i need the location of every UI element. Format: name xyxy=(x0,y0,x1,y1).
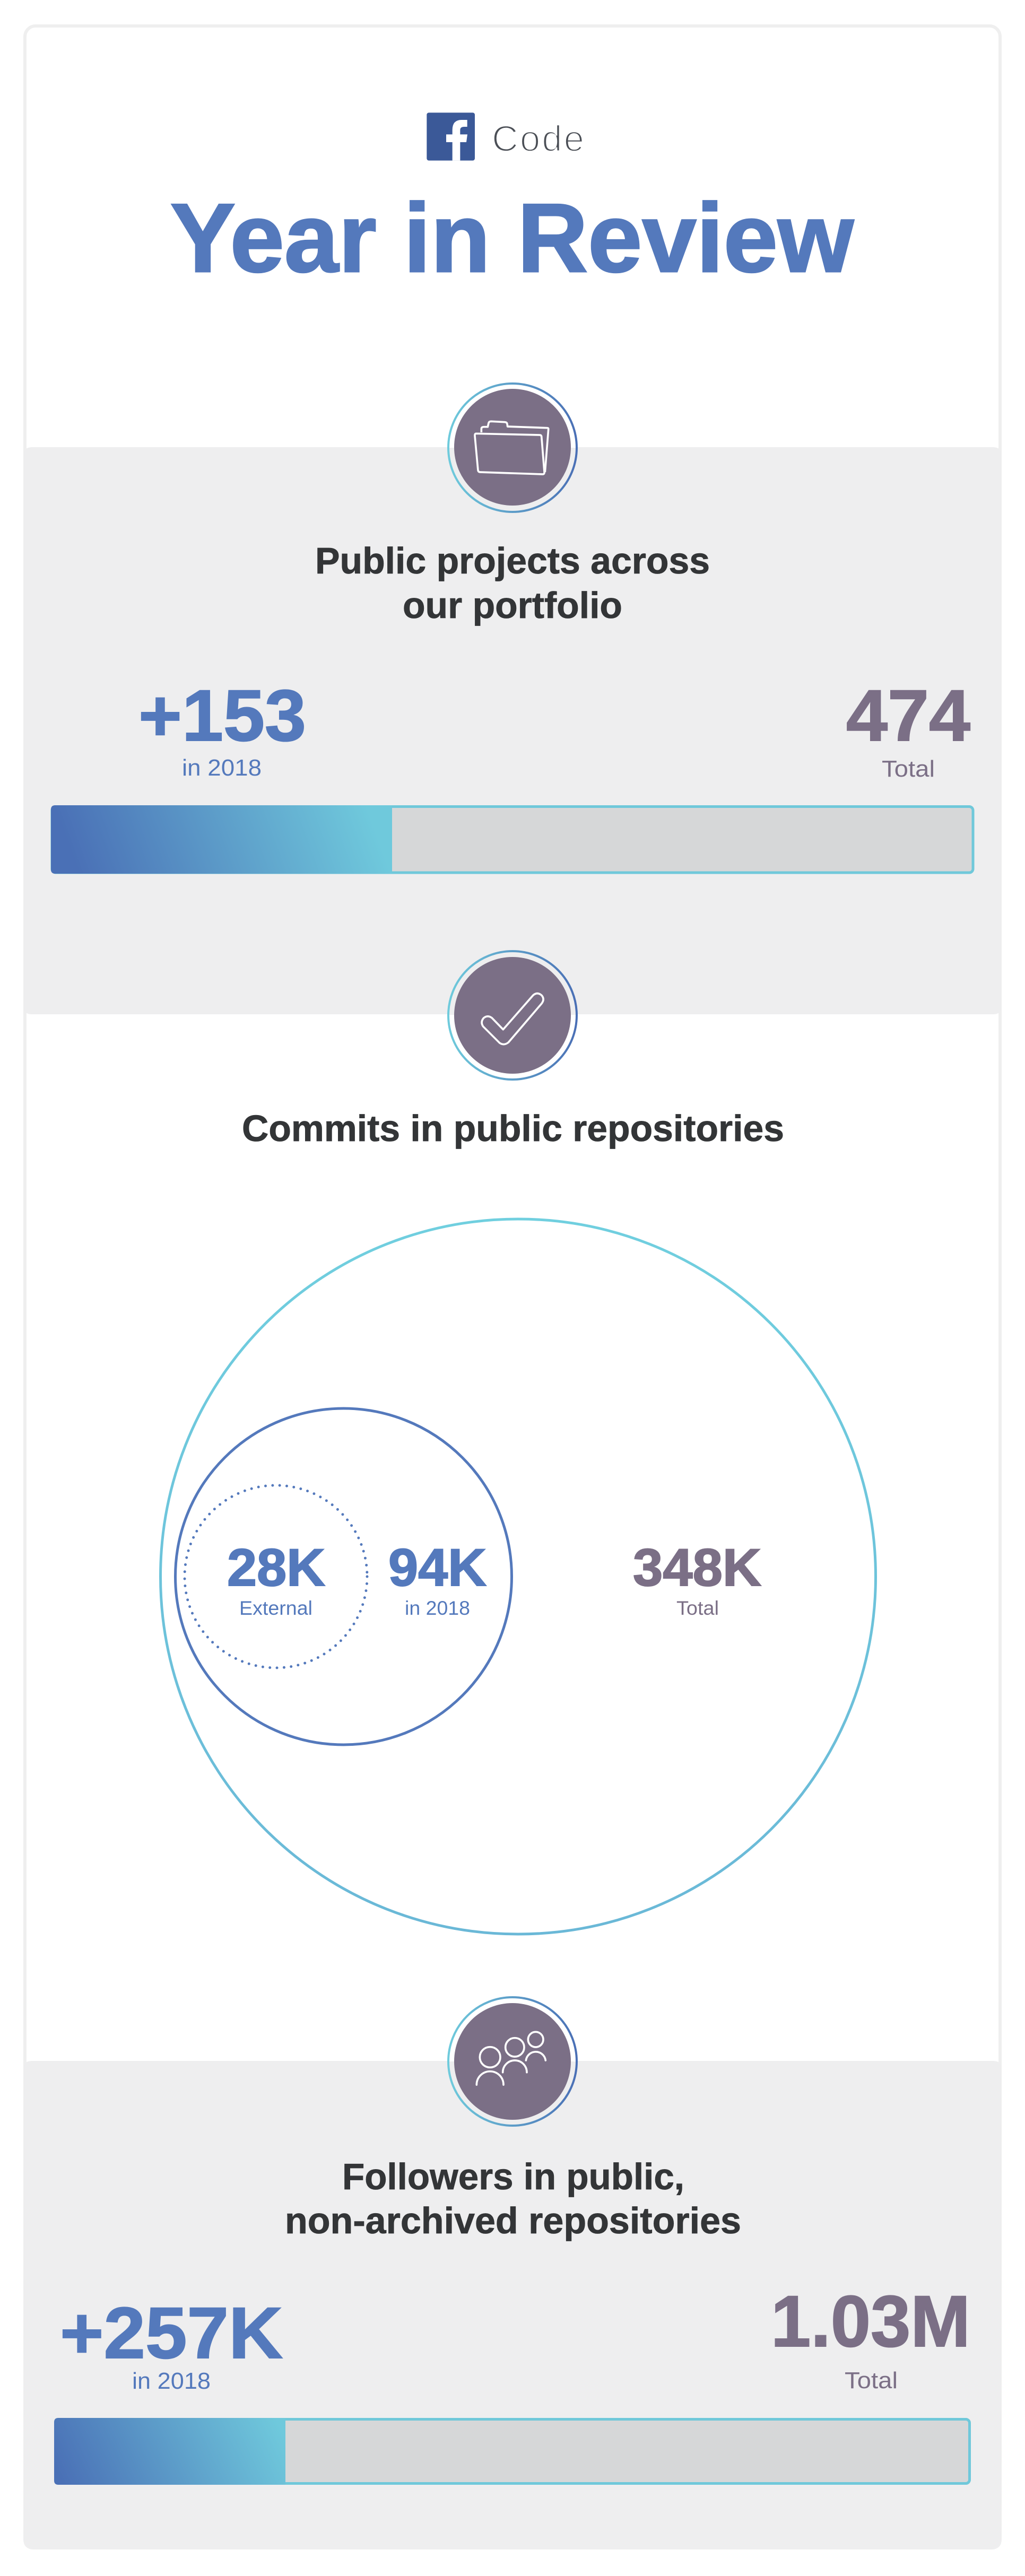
label: 348K total: 348K xyxy=(633,1538,761,1597)
header xyxy=(170,112,854,292)
progress bar xyxy=(51,805,973,874)
label: 94K in 2018: in 2018 xyxy=(405,1597,470,1619)
panel background xyxy=(23,2061,1002,2549)
panel background xyxy=(23,447,1002,1014)
nested circles chart xyxy=(160,1219,875,1934)
stat: +153 in 2018: +153 xyxy=(138,675,306,756)
heading: Followers in public, xyxy=(342,2156,684,2197)
stat: +257K in 2018: +257K xyxy=(60,2293,283,2374)
progress bar xyxy=(54,2418,970,2485)
heading xyxy=(315,540,710,626)
stat: 1.03M total: Total xyxy=(845,2368,898,2394)
stat: 474 total: Total xyxy=(882,756,935,782)
icon: people xyxy=(447,1997,578,2127)
heading: our portfolio xyxy=(403,585,622,626)
heading: Commits in public repositories xyxy=(242,1108,784,1149)
icon: checkmark xyxy=(447,950,578,1080)
panel: public projects xyxy=(23,384,1002,1014)
Facebook logo xyxy=(427,112,475,161)
label: 348K total: Total xyxy=(676,1597,719,1619)
title: Year in Review xyxy=(170,183,854,292)
heading: non-archived repositories xyxy=(285,2200,741,2241)
heading xyxy=(285,2156,741,2241)
stat: +257K in 2018: in 2018 xyxy=(132,2368,211,2394)
icon: folder xyxy=(447,384,578,513)
Code wordmark: Code xyxy=(492,118,584,159)
stat: 1.03M total: 1.03M xyxy=(771,2281,970,2362)
total circle xyxy=(160,1219,875,1934)
label: 28K external: External xyxy=(239,1597,312,1619)
heading: Public projects across xyxy=(315,540,710,581)
external dotted circle xyxy=(185,1485,367,1668)
label: 94K in 2018: 94K xyxy=(388,1538,487,1597)
panel: commits xyxy=(160,950,875,1934)
stat: 474 total: 474 xyxy=(846,675,970,756)
label: 28K external: 28K xyxy=(227,1538,325,1597)
stat: +153 in 2018: in 2018 xyxy=(182,755,262,781)
panel: followers xyxy=(23,1997,1002,2549)
in 2018 circle xyxy=(175,1408,511,1745)
